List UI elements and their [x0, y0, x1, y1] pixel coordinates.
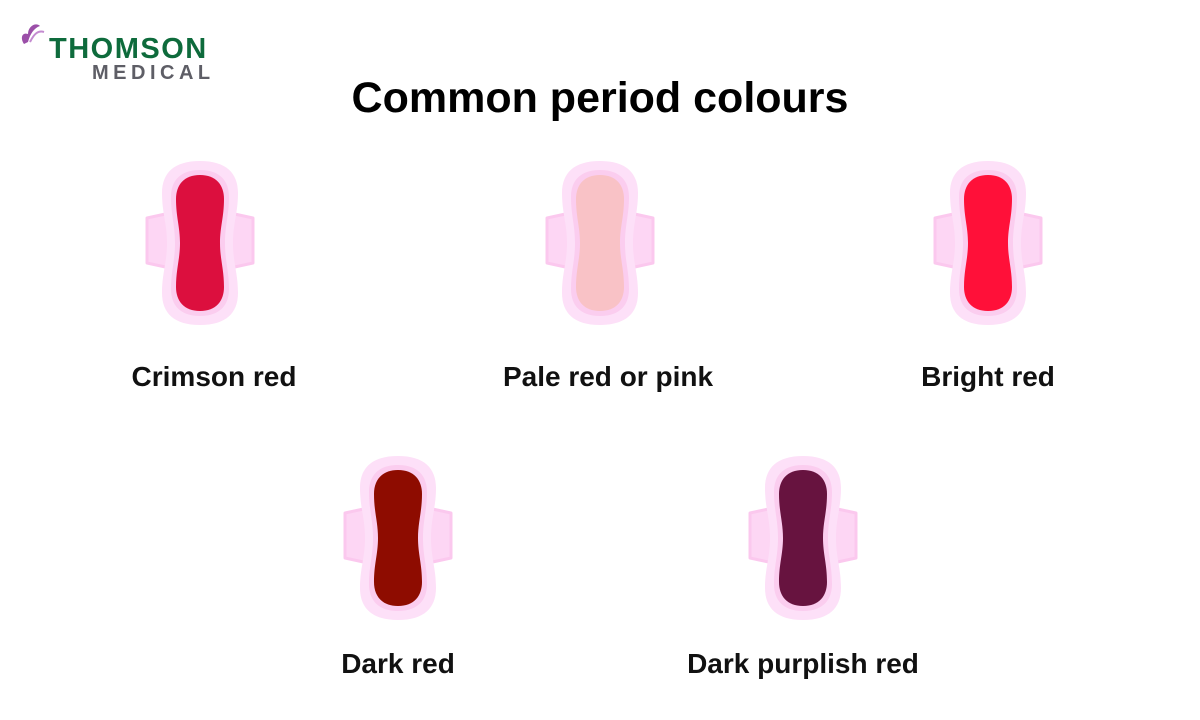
icon: pad dark red	[345, 456, 451, 620]
logo: THOMSON	[49, 33, 208, 65]
icon: pad bright	[935, 161, 1041, 325]
icon: butterfly	[22, 24, 44, 44]
icon: pad crimson	[147, 161, 253, 325]
logo: MEDICAL	[92, 62, 215, 84]
icon: pad purplish	[750, 456, 856, 620]
icon: pad pale	[547, 161, 653, 325]
title: Common period colours	[352, 74, 848, 122]
label: purplish: Dark purplish red	[687, 648, 919, 679]
label: pale: Pale red or pink	[503, 361, 713, 392]
label: bright: Bright red	[921, 361, 1055, 392]
label: dark red: Dark red	[341, 648, 455, 679]
label: crimson: Crimson red	[132, 361, 296, 392]
logo	[22, 24, 215, 84]
